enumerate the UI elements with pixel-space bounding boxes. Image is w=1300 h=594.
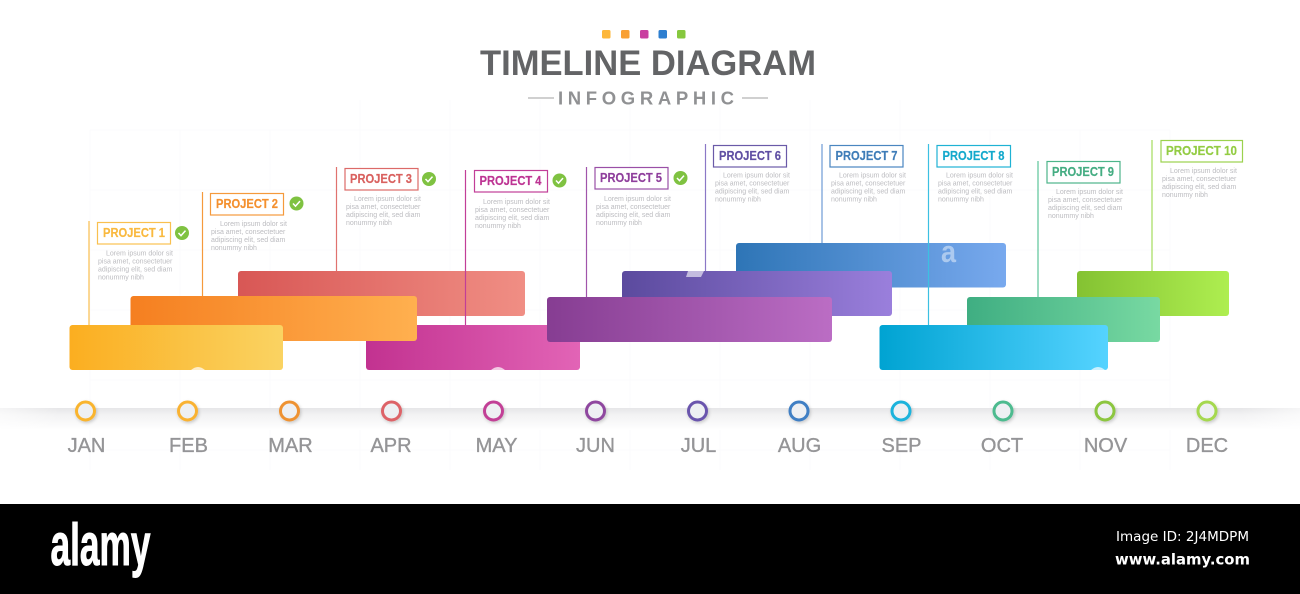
project 4 label	[474, 170, 566, 230]
colour squares	[602, 30, 686, 38]
description: pisa amet, consectetuer	[831, 180, 906, 188]
month labels: SEP	[881, 435, 922, 457]
description: pisa amet, consectetuer	[715, 180, 790, 188]
watermark fragments: a	[941, 234, 957, 269]
gantt bars	[70, 243, 1229, 370]
watermark fragments	[191, 234, 1105, 370]
bar: project 6 indigo	[622, 271, 892, 316]
project 1 label: PROJECT 1	[103, 226, 165, 240]
bar: project 1 yellow	[70, 325, 283, 370]
description: Lorem ipsum dolor sit	[723, 172, 790, 180]
subheading: INFOGRAPHIC	[558, 88, 734, 108]
bar: project 3 red	[238, 271, 525, 316]
description: nonummy nibh	[596, 220, 642, 227]
description: Lorem ipsum dolor sit	[1056, 189, 1123, 196]
description: pisa amet, consectetuer	[938, 180, 1013, 188]
project 3 label	[345, 168, 436, 227]
bar: project 5 purple	[547, 297, 832, 342]
description: Lorem ipsum dolor sit	[946, 172, 1013, 180]
project 7 label: PROJECT 7	[836, 149, 898, 163]
description: adipiscing elit, sed diam	[831, 188, 905, 196]
check icon	[422, 172, 436, 186]
project connector lines	[89, 140, 1152, 326]
marker: Jul	[688, 402, 706, 420]
month labels	[68, 435, 1228, 457]
description: nonummy nibh	[1162, 192, 1208, 199]
project 4 label: PROJECT 4	[480, 174, 542, 188]
project 6 label: PROJECT 6	[719, 149, 781, 163]
description: Lorem ipsum dolor sit	[106, 250, 173, 258]
description: Lorem ipsum dolor sit	[220, 221, 287, 228]
month markers	[76, 402, 1216, 420]
description: nonummy nibh	[211, 245, 257, 252]
description: nonummy nibh	[1048, 213, 1094, 220]
month labels: NOV	[1084, 435, 1128, 457]
description: adipiscing elit, sed diam	[938, 188, 1012, 196]
month labels: JUN	[576, 435, 615, 457]
description: adipiscing elit, sed diam	[1162, 184, 1236, 191]
image id: Image ID: 2J4MDPM	[1116, 529, 1249, 545]
month labels: APR	[370, 435, 412, 457]
bar: project 9 teal	[967, 297, 1160, 342]
description: pisa amet, consectetuer	[1162, 176, 1237, 183]
project 9 label	[1047, 162, 1123, 220]
month labels: JAN	[68, 435, 105, 457]
project 10 label: PROJECT 10	[1166, 144, 1237, 158]
bar: project 8 cyan	[880, 325, 1108, 370]
project 5 label: PROJECT 5	[600, 171, 662, 185]
marker: Dec	[1198, 402, 1216, 420]
description: pisa amet, consectetuer	[211, 229, 286, 236]
lines crossing bars	[466, 144, 928, 325]
marker: Feb	[178, 402, 196, 420]
description: adipiscing elit, sed diam	[475, 215, 549, 222]
description: pisa amet, consectetuer	[346, 204, 421, 211]
project 5 label	[595, 168, 688, 227]
timeline band	[0, 407, 1300, 431]
description: adipiscing elit, sed diam	[346, 212, 420, 219]
month labels: FEB	[169, 435, 208, 457]
description: pisa amet, consectetuer	[1048, 197, 1123, 204]
heading: TIMELINE DIAGRAM	[480, 44, 816, 83]
project 2 label: PROJECT 2	[216, 197, 278, 211]
description: nonummy nibh	[831, 196, 877, 204]
month labels: MAR	[268, 435, 313, 457]
description: Lorem ipsum dolor sit	[604, 196, 671, 203]
bar: project 2 orange	[130, 296, 417, 341]
project 7 label	[830, 146, 906, 204]
bar: project 7 blue	[736, 243, 1006, 288]
description: adipiscing elit, sed diam	[211, 237, 285, 244]
description: Lorem ipsum dolor sit	[354, 196, 421, 203]
website: www.alamy.com	[1115, 550, 1250, 568]
bar: project 4 magenta	[366, 325, 580, 370]
project 2 label	[210, 194, 304, 252]
project 3 label: PROJECT 3	[350, 172, 412, 186]
bar: project 10 green	[1077, 271, 1229, 316]
description: adipiscing elit, sed diam	[98, 266, 172, 274]
marker: Oct	[994, 402, 1012, 420]
description: adipiscing elit, sed diam	[596, 212, 670, 219]
marker: Sep	[892, 402, 910, 420]
project 8 label: PROJECT 8	[942, 149, 1005, 163]
check icon	[552, 174, 566, 188]
project 8 label	[937, 146, 1013, 204]
marker: Apr	[382, 402, 400, 420]
description: Lorem ipsum dolor sit	[1170, 168, 1237, 175]
marker: Jan	[76, 402, 94, 420]
description: adipiscing elit, sed diam	[715, 188, 789, 196]
footer bar	[0, 504, 1300, 594]
marker: May	[484, 402, 502, 420]
marker: Nov	[1096, 402, 1114, 420]
month labels: AUG	[778, 435, 821, 457]
month labels: DEC	[1186, 435, 1228, 457]
month labels: JUL	[681, 435, 716, 457]
check icon	[175, 226, 189, 240]
marker: Jun	[586, 402, 604, 420]
project 1 label	[98, 222, 189, 282]
title block	[480, 30, 816, 108]
description: pisa amet, consectetuer	[98, 258, 173, 266]
check icon	[674, 171, 688, 185]
project 10 label	[1161, 140, 1242, 199]
description: nonummy nibh	[98, 274, 144, 282]
description: adipiscing elit, sed diam	[1048, 205, 1122, 212]
check icon	[290, 196, 304, 210]
description: nonummy nibh	[715, 196, 761, 204]
description: pisa amet, consectetuer	[596, 204, 671, 211]
month labels: MAY	[476, 435, 517, 457]
description: nonummy nibh	[938, 196, 984, 204]
description: Lorem ipsum dolor sit	[839, 172, 906, 180]
project 9 label: PROJECT 9	[1052, 165, 1114, 179]
marker: Aug	[790, 402, 808, 420]
project 6 label	[714, 146, 790, 204]
description: Lorem ipsum dolor sit	[483, 199, 550, 206]
marker: Mar	[280, 402, 298, 420]
description: nonummy nibh	[475, 223, 521, 230]
month labels: OCT	[981, 435, 1023, 457]
description: pisa amet, consectetuer	[475, 207, 550, 214]
logo: alamy	[50, 512, 151, 578]
description: nonummy nibh	[346, 220, 392, 227]
